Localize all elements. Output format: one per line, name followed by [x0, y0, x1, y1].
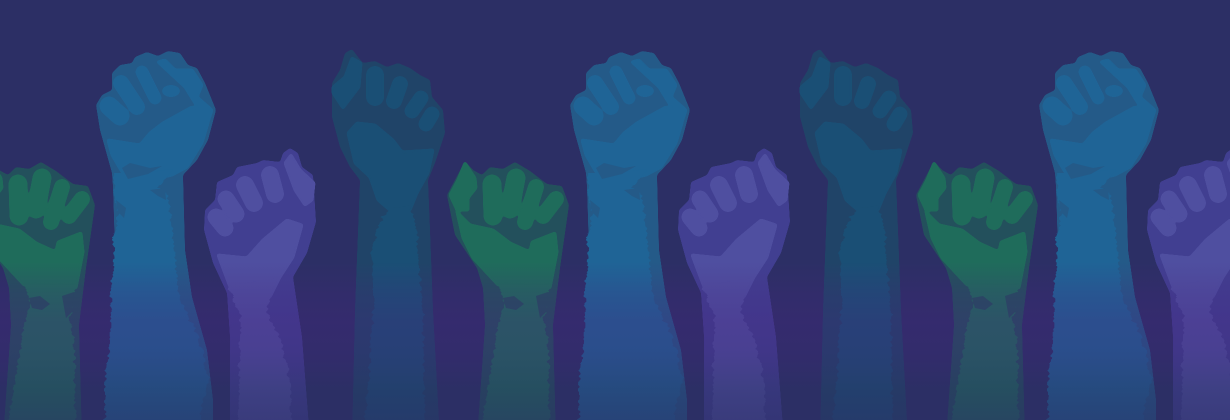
icon: blue fist 1: [96, 51, 216, 420]
icon: green fist 3: [916, 161, 1038, 420]
icon: blue fist 2: [570, 51, 690, 420]
icon: blue fist 3: [1039, 51, 1159, 420]
icon: teal fist 2: [800, 49, 913, 420]
icon: green fist, left edge: [0, 161, 95, 420]
purple gradient band across lower arms: [0, 262, 1230, 420]
icon: purple fist 1: [204, 148, 316, 420]
icon: purple fist 2: [678, 148, 790, 420]
icon: teal fist 1: [332, 49, 445, 420]
icon: green fist 2: [447, 161, 569, 420]
icon: purple fist 3: [1147, 148, 1230, 420]
